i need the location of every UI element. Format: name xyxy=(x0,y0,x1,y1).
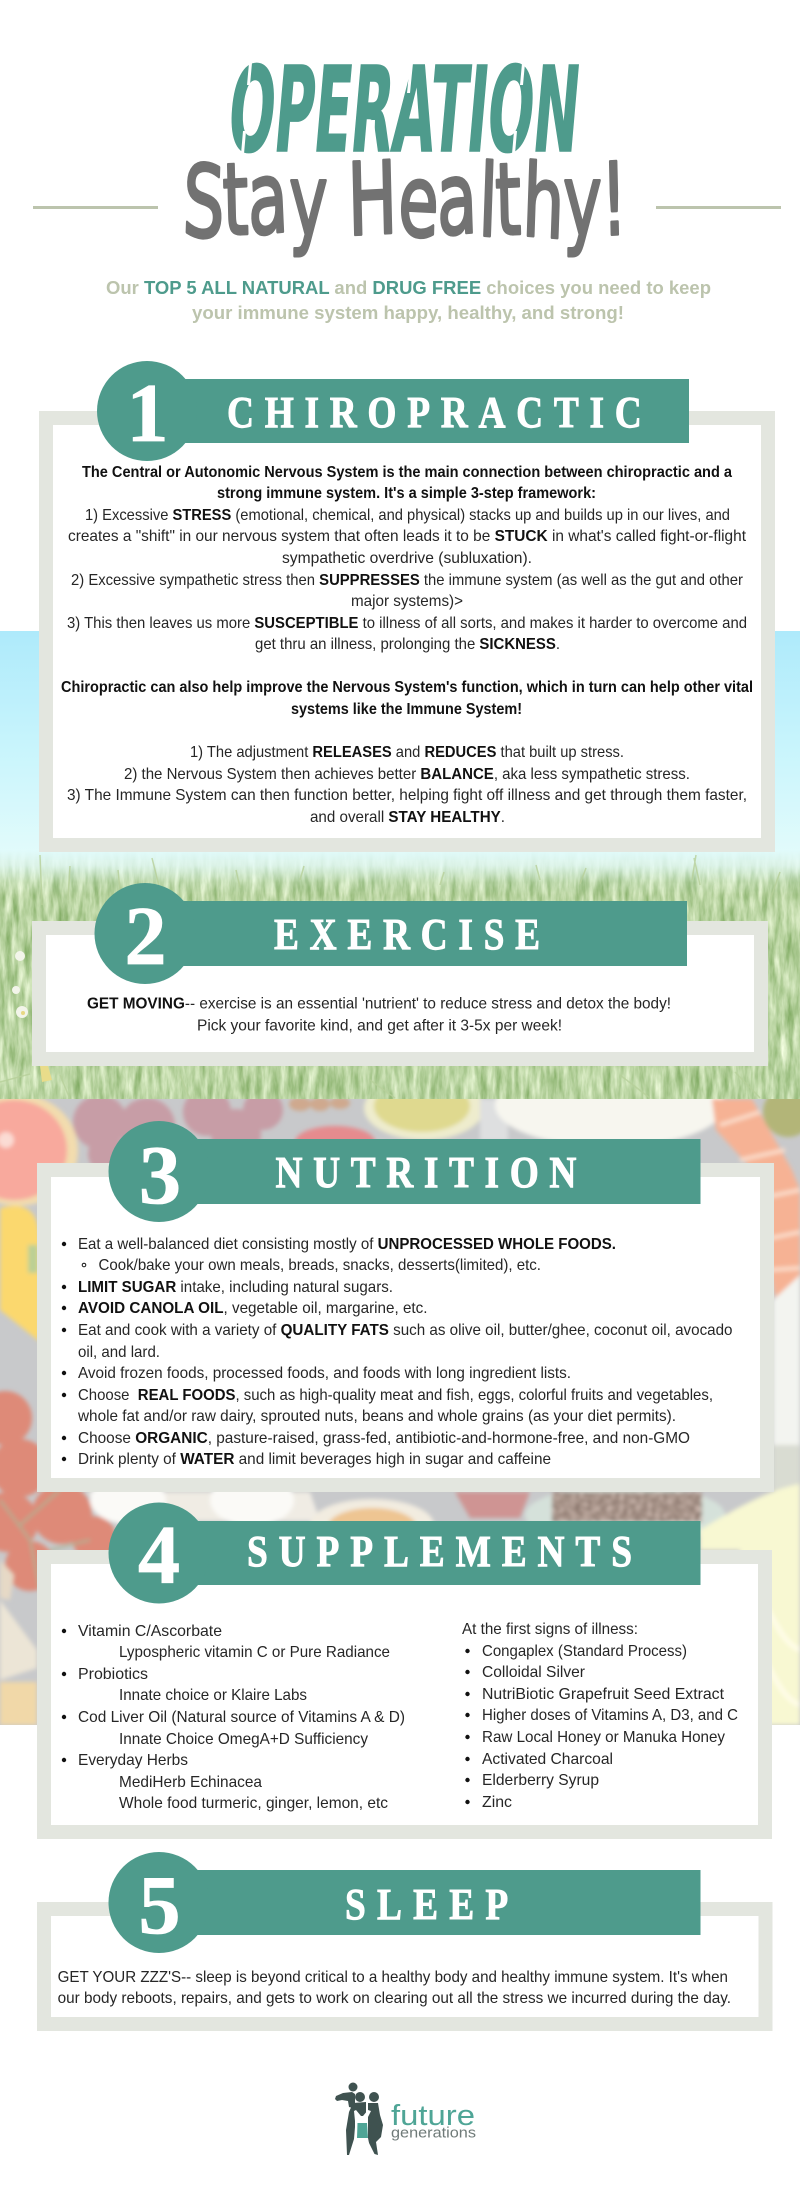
panel 4 right list: Higher doses of Vitamins A, D3, and C xyxy=(482,1707,738,1724)
panel 3 bulleted list: Eat a well-balanced diet consisting mostly of UNPROCESSED WHOLE FOODS. xyxy=(78,1236,616,1253)
panel 4 right list: Raw Local Honey or Manuka Honey xyxy=(482,1729,725,1746)
panel 1 banner: CHIROPRACTIC xyxy=(227,388,642,437)
panel 3 bulleted list: Choose ORGANIC, pasture-raised, grass-fed, antibiotic-and-hormone-free, and non-GMO xyxy=(78,1430,690,1447)
panel 1 body text: major systems)> xyxy=(351,593,463,610)
panel 1 body text: 1) The adjustment RELEASES and REDUCES that built up stress. xyxy=(190,744,624,761)
panel 4 frame xyxy=(44,1557,765,1832)
panel 3 bulleted list: whole fat and/or raw dairy, sprouted nuts, beans and whole grains (as your diet permits). xyxy=(77,1408,676,1425)
panel 3 banner: NUTRITION xyxy=(276,1148,576,1197)
subtitle: your immune system happy, healthy, and strong! xyxy=(192,303,624,323)
panel 4 banner xyxy=(108,1502,700,1604)
panel 4 right list: Activated Charcoal xyxy=(482,1751,613,1768)
panel 1 body text: 1) Excessive STRESS (emotional, chemical, and physical) stacks up and builds up in our lives, and xyxy=(85,507,730,524)
panel 4 left list: Cod Liver Oil (Natural source of Vitamins A & D) xyxy=(78,1709,405,1726)
panel 3 bulleted list: oil, and lard. xyxy=(78,1344,160,1361)
panel 4 left list xyxy=(62,1623,405,1812)
logo wordmark: future: future xyxy=(391,2100,475,2132)
panel 5 body text: GET YOUR ZZZ'S-- sleep is beyond critical to a healthy body and healthy immune system. It's when xyxy=(58,1969,728,1986)
panel 1 body text: sympathetic overdrive (subluxation). xyxy=(282,550,532,567)
panel 4 left list: Whole food turmeric, ginger, lemon, etc xyxy=(119,1795,388,1812)
panel 2 body text: GET MOVING-- exercise is an essential 'nutrient' to reduce stress and detox the body! xyxy=(87,996,671,1012)
panel 4 right list: Colloidal Silver xyxy=(482,1664,586,1681)
panel 5 frame xyxy=(44,1909,766,2024)
panel 1 body text: strong immune system. It's a simple 3-step framework: xyxy=(217,485,596,502)
panel 3 banner: 3 xyxy=(139,1129,181,1222)
panel 2 body text xyxy=(87,996,671,1034)
panel 3 bulleted list xyxy=(62,1236,733,1468)
panel 1 body text: The Central or Autonomic Nervous System is the main connection between chiropractic and a xyxy=(82,464,732,481)
panel 1 banner xyxy=(97,361,689,461)
logo: future generations xyxy=(335,2082,476,2156)
panel 4 banner: 4 xyxy=(138,1509,180,1602)
panel 5 body text xyxy=(58,1969,731,2007)
panel 4 left list: Innate choice or Klaire Labs xyxy=(119,1687,307,1704)
header decorative rule: left xyxy=(33,206,158,209)
panel 1 body text: 2) the Nervous System then achieves better BALANCE, aka less sympathetic stress. xyxy=(124,766,690,783)
panel 1 frame xyxy=(46,418,768,845)
panel 1 body text: 2) Excessive sympathetic stress then SUPPRESSES the immune system (as well as the gut and other xyxy=(71,572,744,589)
panel 1 body text: 3) This then leaves us more SUSCEPTIBLE to illness of all sorts, and makes it harder to overcome and xyxy=(67,615,747,632)
header decorative rule: right xyxy=(656,206,781,209)
panel 4 right list: Zinc xyxy=(482,1794,512,1811)
logo wordmark: generations: generations xyxy=(391,2124,476,2142)
panel 1 banner: 1 xyxy=(126,367,168,460)
panel 1 body text: systems like the Immune System! xyxy=(291,701,522,718)
panel 4 right list xyxy=(462,1621,738,1811)
panel 1 body text: and overall STAY HEALTHY. xyxy=(310,809,505,826)
panel 2 banner xyxy=(94,883,687,984)
panel 4 left list: Vitamin C/Ascorbate xyxy=(78,1623,222,1640)
panel 4 right list: NutriBiotic Grapefruit Seed Extract xyxy=(482,1686,725,1703)
panel 5: sleep xyxy=(44,1852,766,2024)
panel 4 right list: At the first signs of illness: xyxy=(462,1621,638,1638)
logo icon: family silhouette xyxy=(335,2082,383,2156)
panel 4 right list: Elderberry Syrup xyxy=(482,1772,599,1789)
panel 2 body text: Pick your favorite kind, and get after it 3-5x per week! xyxy=(197,1018,562,1034)
panel 4 left list: Everyday Herbs xyxy=(78,1752,188,1769)
panel 3 bulleted list: Avoid frozen foods, processed foods, and foods with long ingredient lists. xyxy=(78,1365,571,1382)
panel 3 frame xyxy=(44,1170,767,1485)
panel 1 body text: 3) The Immune System can then function better, helping fight off illness and get through them faster, xyxy=(67,787,747,804)
panel 4 left list: MediHerb Echinacea xyxy=(119,1774,262,1791)
panel 4: supplements xyxy=(44,1502,765,1832)
panel 4 left list: Probiotics xyxy=(78,1666,148,1683)
panel 1 body text: get thru an illness, prolonging the SICKNESS. xyxy=(255,636,560,653)
title: Stay Healthy!: Stay Healthy! xyxy=(181,139,629,261)
panel 5 body text: our body reboots, repairs, and gets to work on clearing out all the stress we incurred during the day. xyxy=(58,1990,731,2007)
panel 1 body text: creates a "shift" in our nervous system that often leads it to be STUCK in what's called fight-or-flight xyxy=(68,528,747,545)
panel 2 banner: EXERCISE xyxy=(274,910,540,959)
panel 3 bulleted list: AVOID CANOLA OIL, vegetable oil, margarine, etc. xyxy=(78,1300,428,1317)
panel 5 banner: 5 xyxy=(138,1859,180,1952)
background: grass field xyxy=(0,850,800,1099)
panel 1: chiropractic xyxy=(46,361,768,845)
panel 3 bulleted list: Cook/bake your own meals, breads, snacks, desserts(limited), etc. xyxy=(98,1257,541,1274)
background: healthy food photo xyxy=(0,1063,800,1725)
panel 4 right list: Congaplex (Standard Process) xyxy=(482,1643,687,1660)
panel 4 left list: Innate Choice OmegA+D Sufficiency xyxy=(119,1731,368,1748)
panel 5 banner: SLEEP xyxy=(345,1880,508,1929)
panel 3 bulleted list: LIMIT SUGAR intake, including natural sugars. xyxy=(78,1279,393,1296)
panel 5 banner xyxy=(108,1852,700,1953)
panel 3 bulleted list: Choose REAL FOODS, such as high-quality meat and fish, eggs, colorful fruits and vegetables, xyxy=(78,1387,713,1404)
panel 1 body text xyxy=(61,464,753,826)
background: sky band xyxy=(0,631,800,871)
panel 2 frame xyxy=(39,928,761,1059)
panel 3 bulleted list: Drink plenty of WATER and limit beverages high in sugar and caffeine xyxy=(78,1451,551,1468)
panel 3 bulleted list: Eat and cook with a variety of QUALITY FATS such as olive oil, butter/ghee, coconut oil, avocado xyxy=(78,1322,733,1339)
title: OPERATION xyxy=(224,41,586,179)
panel 2: exercise xyxy=(39,883,761,1059)
panel 4 left list: Lypospheric vitamin C or Pure Radiance xyxy=(119,1644,390,1661)
panel 4 banner: SUPPLEMENTS xyxy=(247,1527,632,1576)
panel 2 banner: 2 xyxy=(124,890,166,983)
subtitle xyxy=(106,278,711,323)
panel 3: nutrition xyxy=(44,1121,767,1485)
subtitle: Our TOP 5 ALL NATURAL and DRUG FREE choices you need to keep xyxy=(106,278,711,298)
panel 3 banner xyxy=(108,1121,700,1222)
